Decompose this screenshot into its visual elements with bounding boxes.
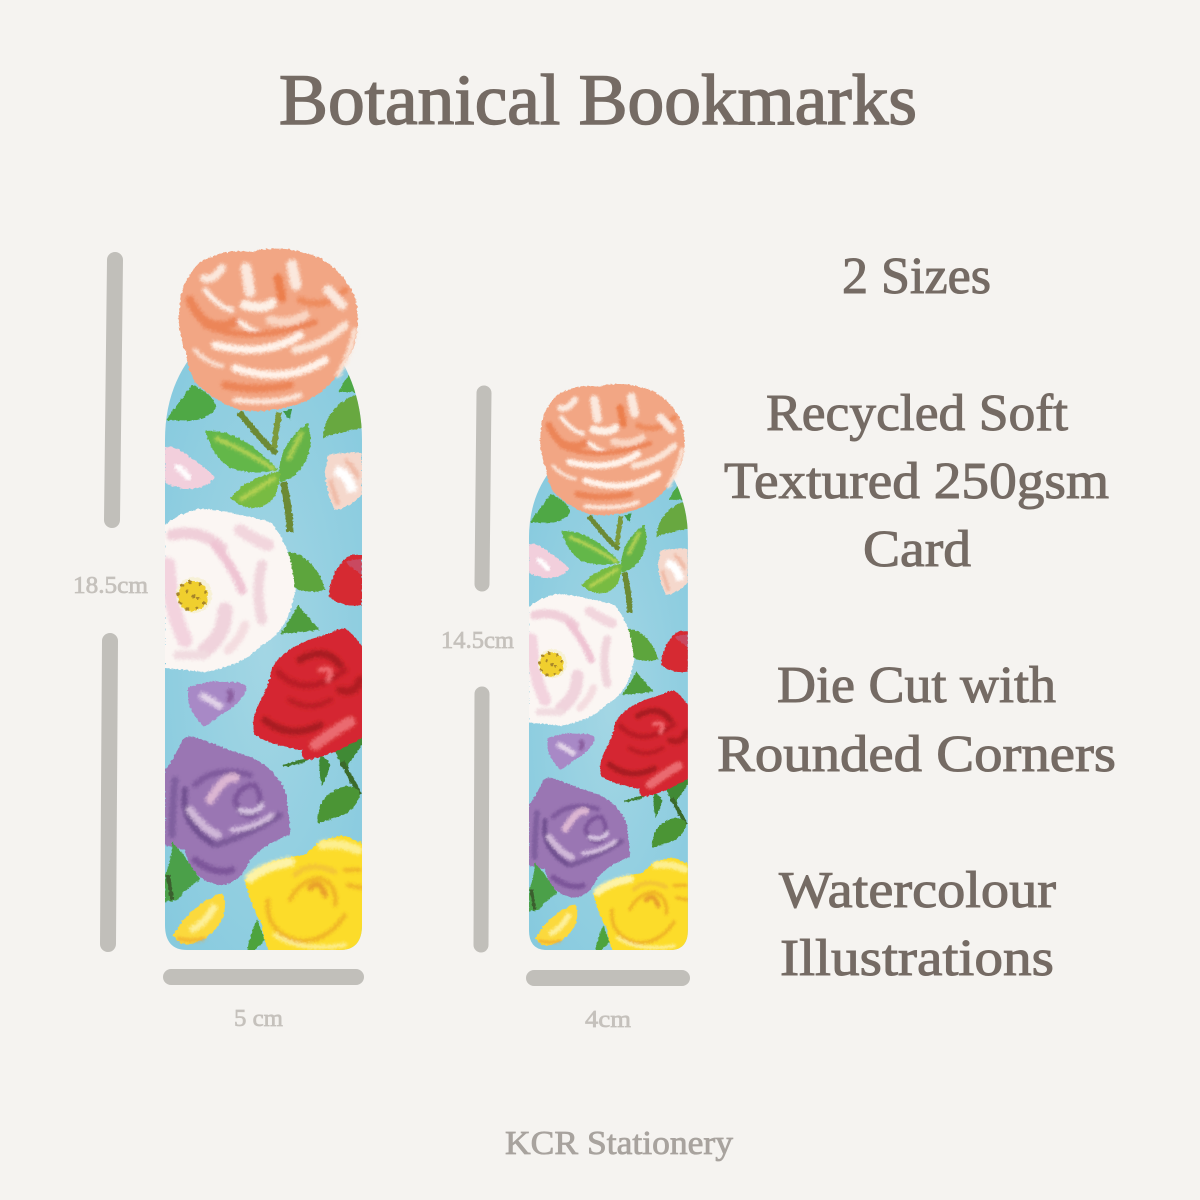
dimension: small bookmark height: 14.5cm xyxy=(441,628,514,654)
feature: card: Textured 250gsm xyxy=(724,453,1109,510)
large bookmark illustration xyxy=(160,249,370,960)
feature: die cut: Rounded Corners xyxy=(717,726,1116,783)
feature: sizes: 2 Sizes xyxy=(842,248,991,305)
feature: illustrations xyxy=(779,862,1056,987)
small bookmark illustration xyxy=(525,384,694,958)
feature: card xyxy=(724,385,1109,578)
feature: die cut xyxy=(717,657,1116,783)
feature: card: Recycled Soft xyxy=(766,385,1069,442)
dimension: large bookmark height: 18.5cm xyxy=(73,573,148,599)
dimension: small bookmark width: 4cm xyxy=(585,1007,631,1033)
feature: illustrations: Watercolour xyxy=(779,862,1056,919)
feature: card: Card xyxy=(863,521,971,578)
dimension: large bookmark width: 5 cm xyxy=(234,1006,283,1032)
feature: illustrations: Illustrations xyxy=(780,930,1054,987)
title: Botanical Bookmarks xyxy=(279,60,917,140)
dimension: large bookmark height xyxy=(73,260,148,944)
footer brand: KCR Stationery xyxy=(505,1125,733,1162)
feature: die cut: Die Cut with xyxy=(777,657,1056,714)
